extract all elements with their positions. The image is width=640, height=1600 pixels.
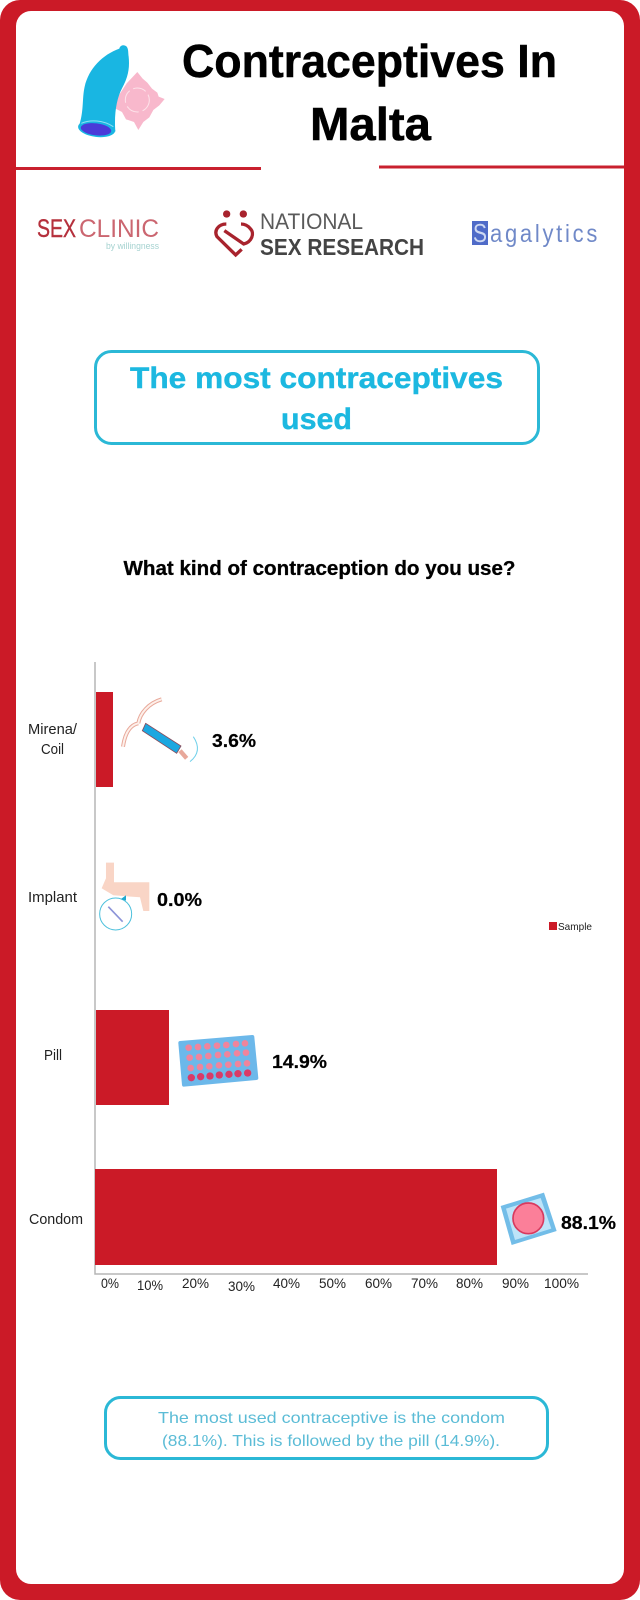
heading box: the most contraceptives used: The most contraceptives (130, 362, 503, 395)
bar: Condom (95, 1169, 497, 1265)
value labels: 3.6% (212, 731, 256, 751)
callout: summary: The most used contraceptive is the condom (158, 1410, 505, 1427)
icon: condom and wrapper (77, 45, 165, 139)
value labels: 88.1% (561, 1213, 616, 1233)
value labels: 0.0% (157, 890, 202, 910)
category labels: Implant (28, 890, 77, 906)
value labels: 14.9% (272, 1052, 327, 1072)
logo: Sex Clinic: CLINIC (79, 215, 159, 243)
chart axes (95, 662, 588, 1274)
logo: National Sex Research: NATIONAL (260, 209, 363, 234)
title divider lines (16, 166, 624, 170)
value labels (157, 731, 616, 1233)
bar chart (28, 662, 616, 1294)
x-axis tick labels: 100% (544, 1275, 579, 1291)
title: Contraceptives In (182, 35, 557, 87)
icon: IUD coil (123, 699, 197, 762)
title (182, 35, 557, 150)
x-axis tick labels: 90% (502, 1275, 529, 1291)
heading box: the most contraceptives used (96, 352, 538, 444)
x-axis tick labels: 0% (101, 1275, 119, 1291)
logo: Sex Clinic: by willingness (106, 241, 159, 252)
x-axis tick labels: 30% (228, 1278, 255, 1294)
logo: Sex Clinic: SEX (37, 215, 76, 243)
icon: pill blister pack (180, 1037, 256, 1085)
callout: summary: (88.1%). This is followed by the pill (14.9%). (162, 1433, 500, 1450)
legend: Sample: Sample (558, 921, 592, 933)
category labels: Mirena/ (28, 722, 78, 738)
logo: National Sex Research: SEX RESEARCH (260, 234, 424, 260)
icon: condom packet (501, 1193, 557, 1245)
category labels: Condom (29, 1212, 83, 1228)
logo: Sagalytics: agalytics (490, 220, 597, 247)
category labels: Pill (44, 1048, 62, 1064)
x-axis tick labels: 70% (411, 1275, 438, 1291)
heading box: the most contraceptives used: used (281, 403, 352, 436)
logo: Sex Clinic (37, 215, 159, 252)
category labels (28, 722, 83, 1228)
logo: Sagalytics: S (473, 218, 487, 248)
bar: Pill (96, 1010, 169, 1105)
x-axis tick labels: 50% (319, 1275, 346, 1291)
x-axis tick labels: 80% (456, 1275, 483, 1291)
icon: arm implant (100, 863, 149, 930)
bar: Mirena/Coil (96, 692, 113, 787)
x-axis tick labels: 10% (137, 1277, 163, 1293)
x-axis tick labels (101, 1275, 579, 1294)
chart question heading: What kind of contraception do you use? (124, 558, 516, 580)
category labels: Coil (41, 742, 64, 758)
x-axis tick labels: 20% (182, 1275, 209, 1291)
logo: National Sex Research (216, 209, 424, 260)
callout: summary (106, 1398, 548, 1458)
title: Malta (310, 98, 431, 150)
x-axis tick labels: 40% (273, 1275, 300, 1291)
x-axis tick labels: 60% (365, 1275, 392, 1291)
